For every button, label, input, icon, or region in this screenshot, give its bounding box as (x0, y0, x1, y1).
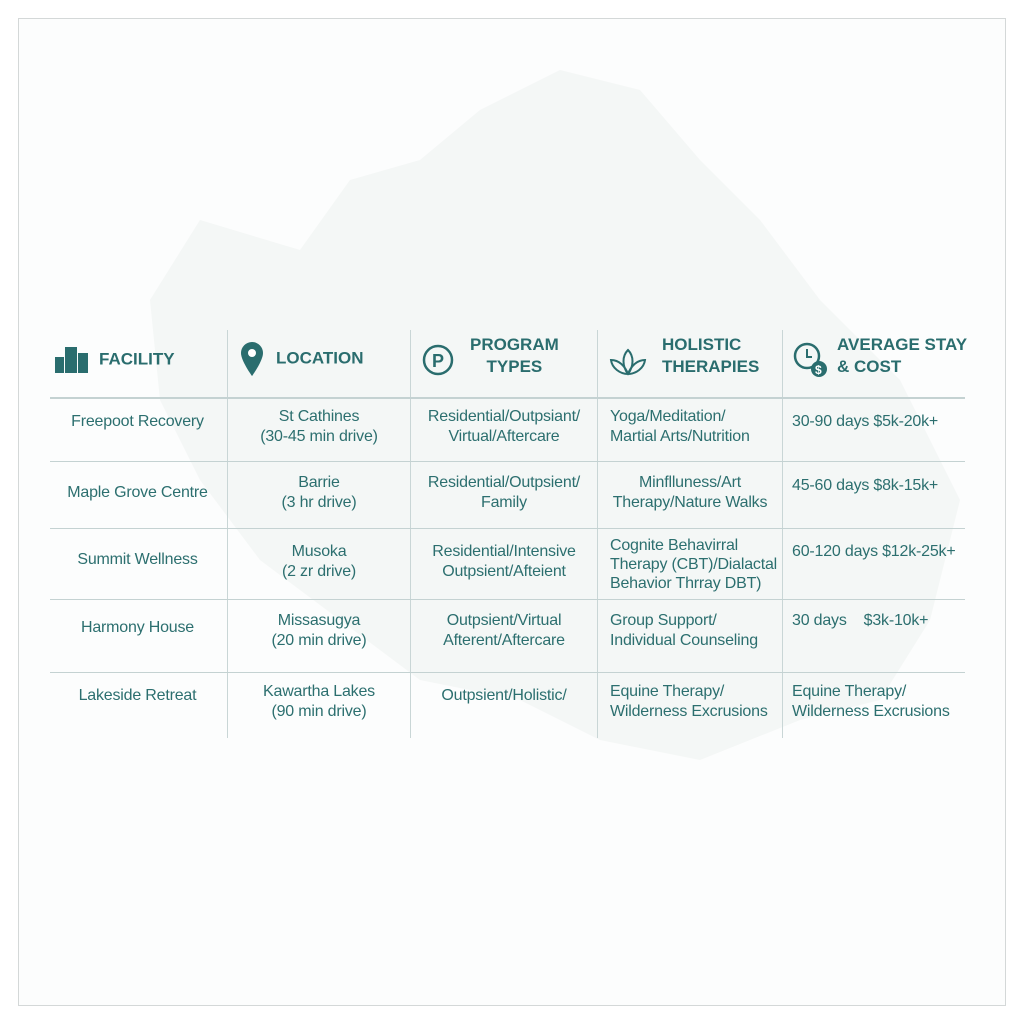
table: 45-60 days $8k-15k+ (792, 477, 938, 494)
table: Residential/Intensive (432, 543, 576, 560)
table: (3 hr drive) (282, 494, 356, 511)
table: Lakeside Retreat (79, 687, 196, 704)
table: Cognite Behavirral (610, 537, 738, 554)
table: (20 min drive) (271, 632, 366, 649)
table: Residential/Outpsient/ (428, 474, 580, 491)
table: Barrie (298, 474, 340, 491)
table: 60-120 days $12k-25k+ (792, 543, 955, 560)
table: Virtual/Aftercare (448, 428, 560, 445)
table: St Cathines (279, 408, 359, 425)
table: Afterent/Aftercare (443, 632, 565, 649)
table: Group Support/ (610, 612, 717, 629)
table: Family (481, 494, 527, 511)
header: facility: FACILITY (99, 349, 175, 368)
table: $ (815, 363, 822, 377)
header: holistic therapies (610, 335, 759, 376)
header: average stay & cost (794, 335, 967, 377)
table: & COST (837, 357, 901, 376)
table: Therapy/Nature Walks (613, 494, 767, 511)
table: 30-90 days $5k-20k+ (792, 413, 938, 430)
table: PROGRAM (470, 335, 559, 354)
table: Wilderness Excrusions (610, 703, 768, 720)
table: Minflluness/Art (639, 474, 741, 491)
header: location: LOCATION (276, 348, 364, 367)
table: Equine Therapy/ (610, 683, 724, 700)
table: Missasugya (278, 612, 360, 629)
table: Musoka (292, 543, 346, 560)
table: Behavior Thrray DBT) (610, 575, 761, 592)
table: Martial Arts/Nutrition (610, 428, 750, 445)
header: program types (422, 335, 559, 376)
table: Outpsient/Holistic/ (441, 687, 567, 704)
table: Summit Wellness (77, 551, 198, 568)
table: 30 days $3k-10k+ (792, 612, 928, 629)
table: Residential/Outpsiant/ (428, 408, 580, 425)
table: Outpsient/Afteient (442, 563, 566, 580)
header: location (241, 342, 364, 376)
table: HOLISTIC (662, 335, 741, 354)
table: Wilderness Excrusions (792, 703, 950, 720)
header: facility (55, 347, 175, 373)
table: (90 min drive) (271, 703, 366, 720)
table (50, 330, 967, 738)
table: (30-45 min drive) (260, 428, 378, 445)
table: Individual Counseling (610, 632, 758, 649)
table: THERAPIES (662, 357, 759, 376)
table: Harmony House (81, 619, 194, 636)
table: Therapy (CBT)/Dialactal (610, 556, 777, 573)
table: Equine Therapy/ (792, 683, 906, 700)
rows: Freepoot Recovery (71, 413, 204, 430)
table: TYPES (487, 357, 542, 376)
table: (2 zr drive) (282, 563, 356, 580)
table: Maple Grove Centre (67, 484, 208, 501)
table: Kawartha Lakes (263, 683, 375, 700)
table: P (432, 351, 444, 371)
table: AVERAGE STAY (837, 335, 967, 354)
table: Outpsient/Virtual (447, 612, 561, 629)
table: Yoga/Meditation/ (610, 408, 725, 425)
